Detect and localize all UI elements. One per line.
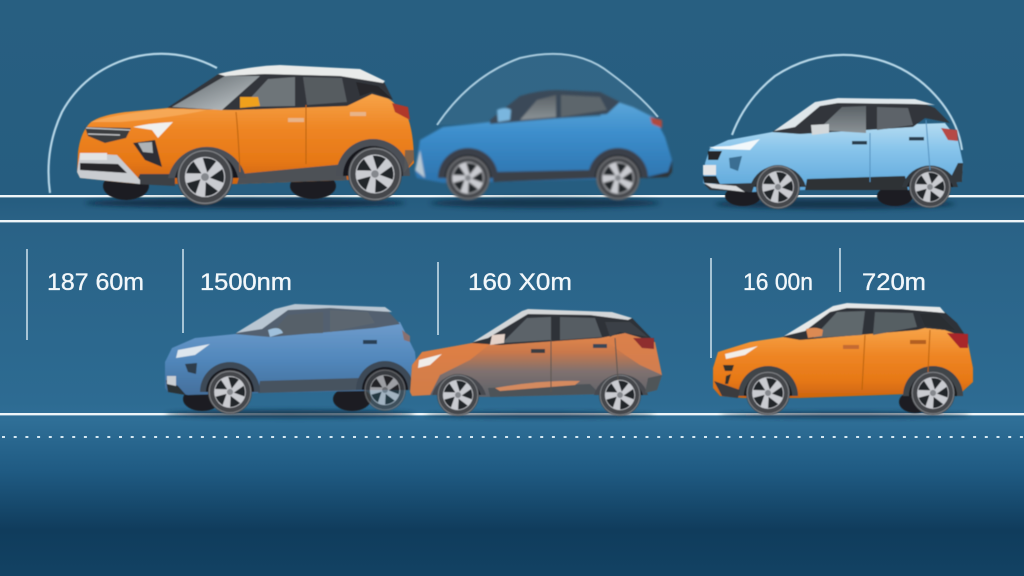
door lines, handles, mirror, tail lamp bbox=[236, 105, 306, 172]
labels: distance values: 16 00n bbox=[743, 269, 813, 296]
blue car, top middle bbox=[415, 90, 672, 208]
far wheels bbox=[103, 172, 336, 200]
wheels bbox=[177, 149, 233, 205]
labels: distance values: 160 X0m bbox=[468, 269, 572, 296]
orange car, bottom right bbox=[713, 303, 973, 418]
headlights bbox=[133, 122, 173, 138]
arc: third car bbox=[732, 55, 962, 150]
front bumper bbox=[77, 153, 140, 184]
greenhouse bbox=[167, 66, 393, 110]
labels: distance values: 187 60m bbox=[47, 269, 144, 296]
hood highlight bbox=[90, 109, 207, 122]
road lines bbox=[0, 195, 1024, 437]
light blue car, top right bbox=[703, 98, 963, 209]
grille bbox=[85, 127, 131, 143]
labels: distance values bbox=[47, 269, 926, 296]
labels: distance values: 1500nm bbox=[200, 269, 292, 296]
arc: first car bbox=[48, 54, 217, 193]
labels: distance values: 720m bbox=[862, 269, 926, 296]
skirts and arches bbox=[237, 164, 347, 184]
steel blue car, bottom left bbox=[165, 304, 418, 418]
copper car, bottom middle bbox=[410, 309, 662, 418]
measurement ticks bbox=[27, 248, 840, 358]
arc: second car bbox=[437, 54, 658, 125]
orange car, top left bbox=[77, 65, 414, 208]
body bbox=[77, 93, 414, 184]
